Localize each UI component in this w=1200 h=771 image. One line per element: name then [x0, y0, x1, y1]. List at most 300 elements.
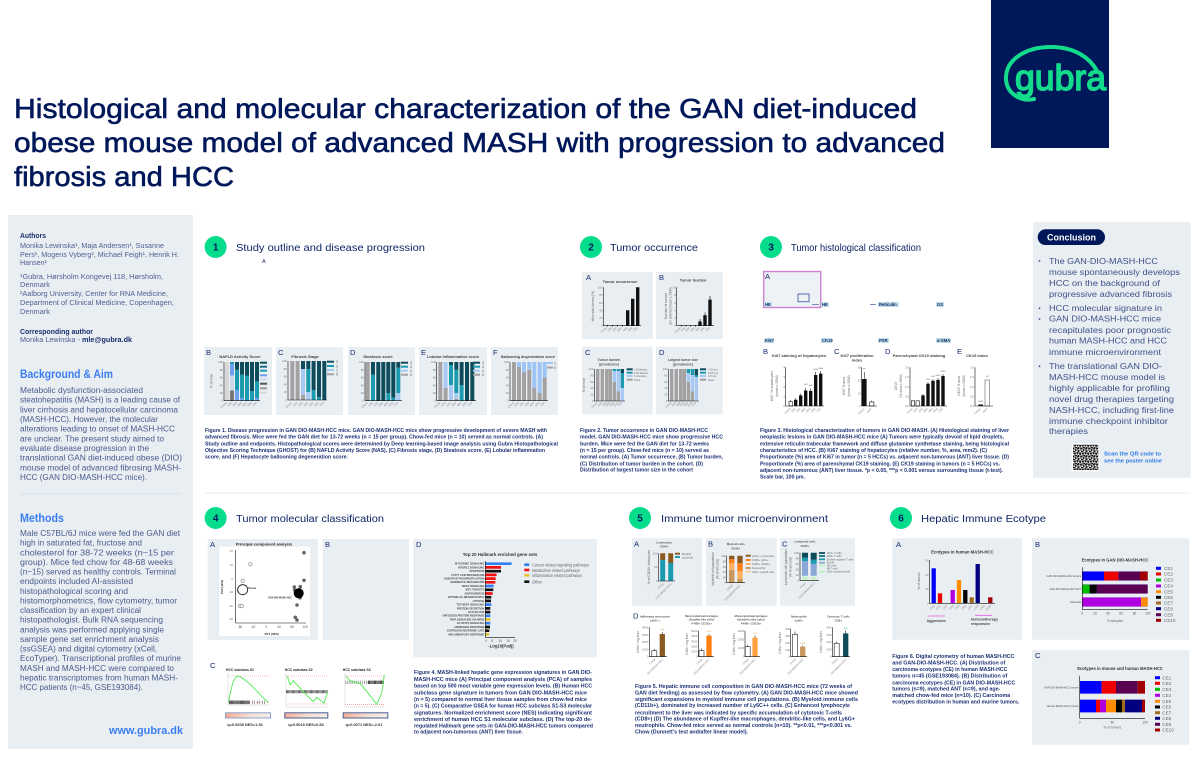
chart: parenchymal CK19 staining: **** — [936, 374, 941, 378]
figure 1 caption: Figure 1. Disease progression in GAN DIO-MASH-HCC mice. GAN DIO-MASH-HCC mice show progressive development of severe MASH with — [205, 428, 547, 434]
GSEA S1: HCC subclass S1 — [226, 668, 254, 672]
chart: fibrosis stage: 23w — [297, 400, 304, 407]
C legend: CE1 — [1162, 675, 1172, 680]
chart: NAFLD Activity Score: 38w — [236, 400, 243, 407]
chart: steatosis score: 20 — [361, 391, 364, 395]
chart: tumor burden prevalence: None — [634, 378, 641, 382]
chart: Ki67 hepatocytes: 0 — [783, 404, 785, 408]
methods: high in saturated fat, fructose and — [20, 539, 142, 548]
chart: largest tumor size prevalence: 1-5 mm — [708, 374, 717, 378]
authors — [20, 233, 179, 344]
chart: lymphoid cells: C — [782, 540, 788, 548]
chart: ecotypes in human MASH-HCC: Ecotypes in human MASH-HCC — [931, 550, 993, 554]
figure 4 caption: enrichment of human HCC S1 molecular subclass. (D) The top-20 de- — [414, 717, 592, 723]
neutrophils: DIO-MASH-HCC — [787, 657, 805, 676]
chart: top 20 Hallmark gene sets: MYC TARGETS — [466, 588, 485, 592]
chart: top 20 Hallmark gene sets: FATTY ACID METABOLISM — [451, 573, 484, 577]
neutrophils: 400 — [785, 627, 790, 631]
chart: top 20 Hallmark gene sets: APOPTOSIS — [469, 569, 485, 573]
chart: tumor occurrence bars: 100 — [598, 286, 603, 290]
chart: ecotypes in mouse and human: GAN DIO-MASH-HCC tumors — [1044, 686, 1079, 690]
B legend: CE6 — [1164, 595, 1173, 600]
chart: lobular inflammation score: 3 — [482, 361, 484, 365]
chart: steatosis score: Chow — [360, 400, 369, 409]
histology stain tags: CK19 — [822, 338, 833, 343]
chart: leukocytes: Lymphoid — [682, 555, 694, 559]
heading 5: Immune tumor microenvironment — [661, 513, 828, 525]
title: Histological and molecular characterization of the GAN diet-induced — [14, 93, 917, 124]
figure 5 caption: Chow (Dunnett's test and/after linear model). — [635, 729, 749, 735]
cytotoxic T cells: Cells / mg liver — [819, 630, 823, 653]
chart: top 20 Hallmark gene sets: MTORC1 SIGNALING — [458, 565, 484, 569]
chart: top 20 Hallmark gene sets: TGF BETA SIGNALING — [456, 602, 484, 606]
methods: Methods — [20, 511, 64, 525]
histology stain tags: α-SMA — [937, 338, 950, 343]
chart: tumor burden prevalence: 60 — [590, 380, 594, 384]
C legend: CE8 — [1162, 716, 1172, 721]
chart: lymphoid cells: 0 — [797, 579, 799, 583]
chart: tumor occurrence bars: 72w — [632, 325, 639, 332]
chart: ecotypes in GAN DIO-MASH-HCC: 0 — [1081, 612, 1083, 616]
chart: top 20 Hallmark gene sets: 0 — [485, 639, 487, 643]
chart: top 20 Hallmark gene sets: ANDROGEN RESPONSE — [454, 625, 485, 629]
chart: ballooning degeneration score: 0 — [507, 399, 509, 403]
chart: Ki67 hepatocytes: *** — [804, 383, 808, 387]
chart: tumor burden prevalence: 72w — [616, 400, 624, 407]
section 4: tumor molecular classification — [205, 507, 597, 736]
chart: lobular inflammation score: 0 — [482, 373, 484, 377]
monocyte macrophages 1: Chow — [696, 657, 704, 665]
figure 3 caption: adjacent non-tumorous (ANT) liver tissue. *p < 0.05, ***p < 0.001 versus surrounding tissue (t-test). — [760, 468, 1004, 474]
cytotoxic T cells: Chow — [831, 657, 839, 665]
chart: tumor burden prevalence: 38w — [604, 400, 612, 407]
chart: fibrosis stage: 60w — [313, 400, 320, 407]
chart: immune cell counts — [633, 612, 850, 676]
chart: top 20 Hallmark gene sets: -Log10(Padj) — [488, 644, 514, 648]
background and aim: steatohepatitis (MASH) is a leading cause of — [20, 396, 181, 405]
chart: tumor occurrence bars: 38w — [616, 325, 623, 332]
monocyte macrophages 2: 0 — [743, 655, 745, 659]
C legend: CE6 — [1162, 705, 1172, 710]
chart: CK19 index: CK19 % area — [957, 376, 961, 396]
background and aim: HCC (GAN DIO-MASH-HCC mice). — [20, 473, 147, 482]
chart: largest tumor size prevalence: (prevalence) — [673, 362, 693, 366]
chart: lobular inflammation score: 60w — [461, 400, 468, 407]
infiltrating monocytes: 4000 — [642, 626, 649, 630]
chart: parenchymal CK19 staining: 23w — [917, 406, 924, 413]
chart: NAFLD Activity Score: 13w — [226, 400, 233, 407]
chart: ecotypes in mouse and human — [1032, 650, 1189, 745]
chart: ballooning degeneration score: 20 — [506, 391, 509, 395]
chart: fibrosis stage — [276, 347, 343, 415]
chart: ecotypes in human MASH-HCC: Immunotherapy — [971, 618, 998, 622]
chart: lobular inflammation score: 48w — [456, 400, 463, 407]
chart: Ki67 hepatocytes: 72w — [815, 406, 822, 413]
QR code — [1072, 443, 1100, 471]
chart: myeloid cells: 20 — [723, 576, 726, 580]
chart: Ki67 proliferation index: Ki67 % area — [842, 377, 846, 395]
chart: PCA scatter — [208, 539, 318, 640]
chart: ecotypes in mouse and human: C — [1035, 651, 1041, 660]
chart: tumor burden bars: 38w — [689, 325, 696, 332]
neutrophils: 300 — [785, 634, 790, 638]
conclusion bullets: HCC on the background of — [1049, 278, 1161, 288]
chart: lymphoid cells: 60 — [796, 562, 799, 566]
chart: CK19 index: (mean ± SEM) — [962, 375, 966, 397]
chart: steatosis score: 60 — [361, 376, 364, 380]
chart: ecotypes in human MASH-HCC: CE4 — [948, 604, 955, 611]
chart: lobular inflammation score: 20 — [433, 391, 436, 395]
heading 5: 5 — [637, 514, 643, 524]
chart: tumor burden bars: 8 — [674, 293, 676, 297]
chart: lymphoid cells: CD8+ T cells — [827, 554, 842, 558]
figure 1 caption: Objective Scoring Technique (GHOST) for (B) NAFLD Activity Score (NAS), (C) Fibrosis stage, (D) Steatosis score, (E) Lobular inflammation — [205, 448, 545, 454]
chart: lymphoid cells: Lymphoid cell population — [784, 549, 788, 585]
chart: ballooning degeneration score: Ballooning degeneration score — [501, 355, 555, 359]
chart: myeloid cells: 40 — [723, 570, 726, 574]
infiltrating monocytes: 3000 — [642, 633, 649, 637]
chart: tumor occurrence bars: A — [586, 273, 592, 282]
chart: NAFLD Activity Score: 60w — [246, 400, 253, 407]
figure 6 caption: carcinoma ecotypes (CE) in GAN DIO-MASH-HCC — [892, 680, 1016, 686]
B legend: CE8 — [1164, 606, 1173, 611]
chart: ecotypes in human MASH-HCC: CE6 — [960, 604, 967, 611]
chart: NAFLD Activity Score: 72w — [251, 400, 258, 407]
chart: largest tumor size prevalence: Chow — [664, 400, 673, 409]
chart: parenchymal CK19 staining: 2.0 — [905, 366, 909, 370]
chart: tumor burden prevalence: 20 — [590, 393, 594, 397]
QR caption: Scan the QR code to — [1104, 452, 1162, 458]
chart: steatosis score: 0 — [362, 399, 364, 403]
histology stain tags — [764, 302, 951, 343]
chart: Ki67 hepatocytes: Ki67, % hepatocytes — [770, 371, 774, 401]
chart: tumor burden bars: 0 — [674, 324, 676, 328]
chart: tumor occurrence bars: 40 — [599, 308, 603, 312]
background and aim: evaluate disease progression in the — [20, 444, 150, 453]
methods: hepatic transcriptomes from human MASH- — [20, 674, 178, 682]
histology stain tags: Reticulin — [879, 302, 897, 307]
chart: top 20 Hallmark gene sets: ESTROGEN RESPONSE LATE — [447, 629, 485, 633]
chart: fibrosis stage: 2 — [336, 364, 338, 368]
conclusion bullets: therapies — [1049, 426, 1088, 436]
chart: NAFLD Activity Score: 40 — [220, 383, 223, 387]
figure 6 caption: Figure 6. Digital cytometry of human MASH-HCC — [892, 654, 1015, 660]
chart: tumor burden prevalence: (prevalence) — [599, 362, 619, 366]
chart: steatosis score: 2 — [410, 365, 412, 369]
neutrophils: 100 — [785, 648, 790, 652]
methods: Male C57BL/6J mice were fed the GAN diet — [20, 529, 181, 538]
chart: lobular inflammation score: 23w — [445, 400, 452, 407]
infiltrating monocytes: Ly6C++ — [650, 618, 660, 622]
C legend: CE7 — [1162, 710, 1172, 715]
chart: tumor burden prevalence: 48w — [608, 400, 616, 407]
chart: tumor occurrence bars: Mice with tumors (%) — [591, 291, 595, 321]
chart: largest tumor size prevalence: D — [659, 348, 665, 357]
chart: top 20 Hallmark gene sets: Top 20 Hallmark enriched gene sets — [463, 552, 538, 557]
chart: fibrosis stage: 0 — [285, 398, 287, 402]
chart: Ki67 hepatocytes: B — [763, 347, 768, 356]
cytotoxic T cells: 600 — [827, 633, 832, 637]
chart: Ki67 proliferation index: Tumor — [857, 407, 866, 416]
figure 1 caption: Study outline and endpoints. Histopathological scores were determined by Deep learning-based image analysis using Gubra Histopathological — [205, 441, 559, 447]
cytotoxic T cells: 800 — [827, 626, 832, 630]
chart: ecotypes in mouse and human: 100 — [1142, 720, 1148, 724]
chart: fibrosis stage: Fibrosis Stage — [291, 354, 320, 359]
chart: largest tumor size prevalence: 80 — [664, 373, 668, 377]
chart: ecotypes in human MASH-HCC: CE10 — [984, 604, 992, 612]
chart: tumor burden prevalence: 40 — [590, 386, 594, 390]
chart: ecotypes in human MASH-HCC: CE1 — [929, 604, 936, 611]
chart: steatosis score: 48w — [382, 400, 390, 407]
conclusion bullets: highly applicable for profiling — [1049, 383, 1170, 393]
figure 4 caption: subclass gene signature in tumors from GAN DIO-MASH-HCC mice — [414, 690, 587, 696]
figure 5 caption: Figure 5. Hepatic immune cell composition in GAN DIO-MASH-HCC mice (72 weeks of — [635, 684, 852, 690]
B legend: CE4 — [1164, 584, 1173, 589]
chart: myeloid cells: Chow — [726, 583, 734, 591]
chart: Ki67 proliferation index: index — [852, 358, 863, 362]
C legend: CE2 — [1162, 681, 1172, 686]
chart: CK19 index: ** — [986, 375, 989, 379]
methods: sample gene set enrichment analysis — [20, 635, 159, 644]
chart: tumor burden bars: Chow — [674, 325, 682, 334]
figure 2 caption: burden. Mice were fed the GAN diet for 13-72 weeks — [580, 441, 709, 447]
methods: (ssGSEA) and digital cytometry (xCell, — [20, 645, 157, 654]
monocyte macrophages 1: 3000 — [691, 640, 698, 644]
chart: parenchymal CK19 staining: 0.0 — [905, 404, 909, 408]
chart: top 20 Hallmark gene sets: XENOBIOTIC METABOLISM — [450, 580, 484, 584]
logo: gubra — [991, 0, 1109, 148]
chart: largest tumor size prevalence: 38w — [678, 400, 686, 407]
chart: leukocytes: Myeloid — [682, 552, 691, 556]
chart: ecotypes in human MASH-HCC: CE5 — [954, 604, 961, 611]
section 1: study outline and disease progression: A — [262, 259, 266, 265]
chart: ballooning degeneration score: 13w — [513, 400, 520, 407]
chart: PCA scatter: GAN DIO-MASH-HCC — [268, 596, 292, 600]
chart: lobular inflammation score: 80 — [433, 368, 436, 372]
monocyte macrophages 2 — [732, 614, 768, 676]
conclusion bullets — [1039, 256, 1180, 436]
chart: tumor burden bars: per animal (mean ± SEM) — [668, 287, 672, 325]
chart: myeloid cells: (% of all cells) — [716, 559, 720, 579]
chart: lymphoid cells: B cells — [827, 561, 835, 565]
chart: steatosis score: 60w — [387, 400, 395, 407]
chart: PCA scatter: Chow — [248, 586, 257, 590]
C legend — [1155, 675, 1174, 733]
chart: Ki67 hepatocytes: 3 — [783, 375, 785, 379]
background and aim: alterations leading to onset of MASH-HCC — [20, 425, 175, 434]
chart: Ki67 proliferation index: 20 — [858, 378, 861, 382]
figure 4 caption — [414, 670, 593, 736]
heading 2: 2 — [588, 242, 594, 254]
chart: leukocytes: A — [634, 540, 640, 548]
chart: CK19 index: E — [957, 347, 962, 356]
figure 6 caption: tumors (n=9), matched ANT (n=9), and age- — [892, 687, 1001, 693]
chart: ecotypes in human MASH-HCC: responsive — [971, 622, 990, 626]
B legend: CE7 — [1164, 601, 1173, 606]
chart: tumor burden prevalence: 1-5 lesions — [634, 374, 647, 378]
chart: tumor occurrence bars: 20 — [599, 316, 603, 320]
chart: Ki67 hepatocytes: Chow — [783, 406, 792, 415]
chart: top 20 Hallmark gene sets: 20 — [513, 639, 517, 643]
chart: ecotypes in human MASH-HCC: % of tumors — [917, 572, 921, 590]
chart: ecotypes in GAN DIO-MASH-HCC — [1032, 538, 1189, 640]
methods: histopathologist. Bulk RNA sequencing — [20, 616, 163, 625]
chart: lobular inflammation score: 60 — [433, 376, 436, 380]
conclusion bullets: MASH-HCC mouse model is — [1049, 372, 1165, 382]
conclusion bullets: immune checkpoint inhibitor — [1049, 416, 1168, 426]
chart: CK19 index: 1.5 — [970, 375, 974, 379]
chart: fibrosis stage: Chow — [285, 400, 293, 409]
conclusion bullets: recapitulates poor prognostic — [1049, 325, 1172, 335]
figure 1 caption — [205, 428, 559, 461]
authors: mle@gubra.dk — [82, 337, 132, 344]
methods: analysis was performed applying single — [20, 625, 165, 634]
chart: tumor burden prevalence: 100 — [589, 367, 594, 371]
chart: Ki67 hepatocytes: 48w — [805, 406, 812, 413]
chart: ecotypes in GAN DIO-MASH-HCC: 60 — [1119, 612, 1123, 616]
figure 5 caption: neutrophils. Chow-fed mice served as normal controls (n=10). **p<0.01, ***p<0.001 vs. — [635, 723, 853, 729]
chart: CK19 index — [957, 347, 993, 416]
chart: PCA scatter: 120 — [302, 625, 308, 629]
heading 4: 4 — [213, 514, 219, 524]
chart: tumor occurrence bars: 80 — [599, 293, 603, 297]
chart: ecotypes in human MASH-HCC — [892, 538, 1022, 640]
chart: myeloid cells: Neutrophils — [752, 566, 766, 570]
chart: CK19 index: **** — [978, 400, 984, 404]
chart: largest tumor size prevalence: 100 — [663, 367, 668, 371]
section 5: immune tumor microenvironment — [629, 507, 858, 735]
authors: Authors — [20, 233, 46, 240]
methods: EcoTyper). Transcriptional profiles of murine — [20, 654, 182, 663]
chart: ecotypes in human MASH-HCC: 0 — [927, 601, 929, 605]
chart: ecotypes in mouse and human: Ecotypes in mouse and human MASH-HCC — [1077, 666, 1163, 671]
chart: tumor occurrence bars: 23w — [611, 325, 618, 332]
chart: top 20 Hallmark gene sets: HYPOXIA — [473, 599, 484, 603]
chart: ecotypes in human MASH-HCC: CE3 — [941, 604, 948, 611]
chart: PCA scatter: -20 — [229, 590, 233, 594]
monocyte macrophages 2: 1000 — [738, 646, 745, 650]
chart: CK19 index: ANT — [982, 407, 989, 414]
chart: myeloid cells: DIO-MASH-HCC — [724, 583, 742, 602]
chart: steatosis score: 23w — [372, 400, 380, 407]
chart: leukocytes: DIO-MASH-HCC — [655, 582, 673, 600]
chart: ecotypes in human MASH-HCC: Aggressive — [927, 619, 946, 623]
authors: Denmark — [20, 309, 51, 316]
chart: top 20 Hallmark gene sets: GLYCOLYSIS — [468, 610, 485, 614]
heading 3: 3 — [768, 242, 774, 254]
chart: ecotypes in GAN DIO-MASH-HCC: GAN DIO-MASH-HCC tumors — [1047, 574, 1082, 578]
authors: Hansen¹ — [20, 260, 48, 267]
chart: myeloid cells: F4/80+ Ly6C+ — [752, 558, 769, 562]
chart: ecotypes in human MASH-HCC: 20 — [925, 573, 929, 577]
monocyte macrophages 2: F4/80+ CD11b+ — [741, 621, 762, 625]
chart: largest tumor size prevalence: >10 mm — [708, 368, 717, 372]
conclusion pill: Conclusion — [1047, 232, 1096, 242]
chart: tumor burden bars: Number of tumors — [664, 292, 668, 319]
chart: ecotypes in human MASH-HCC: CE2 — [935, 604, 942, 611]
B legend: CE2 — [1164, 572, 1173, 577]
chart: leukocytes — [632, 538, 702, 606]
chart: myeloid cells: F4/80+ CD11b+ — [752, 562, 771, 566]
chart: lobular inflammation score: 0 — [434, 399, 436, 403]
chart: ecotypes in GAN DIO-MASH-HCC: B — [1035, 540, 1040, 549]
neutrophils: 200 — [785, 641, 790, 645]
chart: tumor burden prevalence: Chow — [590, 400, 599, 409]
GSEA S2: HCC subclass S2 — [285, 668, 313, 672]
neutrophils: **** — [800, 642, 806, 646]
methods: cholesterol for 38-72 weeks (n~15 per — [20, 548, 174, 557]
chart: Ki67 proliferation index: ** — [863, 368, 866, 372]
infiltrating monocytes: Cells / mg liver — [636, 630, 640, 653]
chart: tumor burden prevalence: 13w — [596, 400, 604, 407]
cytotoxic T cells: CD8+ — [835, 618, 842, 622]
conclusion bullets: progressive advanced fibrosis — [1049, 289, 1172, 299]
chart: Ki67 hepatocytes: (mean ± SEM) — [775, 375, 779, 397]
chart: PCA scatter: PC1 (35%) — [265, 632, 279, 636]
chart: top 20 Hallmark gene sets: D — [416, 540, 422, 549]
chart: fibrosis stage: 0 — [336, 373, 338, 377]
chart: tumor occurrence bars: 60 — [599, 301, 603, 305]
chart: myeloid cells: 60 — [723, 565, 726, 569]
C legend: CE9 — [1162, 722, 1172, 727]
chart: lymphoid cells: NKT cells — [827, 566, 838, 570]
chart: parenchymal CK19 staining — [885, 347, 947, 415]
figure 6 caption: tumors n=45 (GSE193084). (B) Distribution of — [892, 674, 1008, 680]
chart: PCA scatter: A — [210, 540, 216, 549]
chart: ballooning degeneration score: 60 — [506, 376, 509, 380]
chart: largest tumor size prevalence: 60w — [686, 400, 694, 407]
monocyte macrophages 1: 0 — [696, 655, 698, 659]
infiltrating monocytes: Infiltrating monocytes — [640, 614, 670, 618]
chart: ballooning degeneration score: 48w — [528, 400, 536, 407]
GSEA S2 — [285, 668, 328, 727]
conclusion pill — [1038, 229, 1105, 245]
figure 5 caption — [635, 684, 858, 735]
authors: ¹Gubra, Hørsholm Kongevej 118, Hørsholm, — [20, 274, 163, 281]
chart: NAFLD Activity Score: 48w — [241, 400, 248, 407]
chart: tumor burden bars: 13w — [680, 325, 687, 332]
figure 3 caption — [760, 428, 1010, 481]
histology stain tags: HE — [822, 302, 828, 307]
figure 6 caption: and GAN-DIO-MASH-HCC. (A) Distribution of — [892, 661, 1006, 667]
chart: lobular inflammation score: 13w — [440, 400, 447, 407]
figure 3 caption: extensive reticulin trabecular framework and diffuse glutamine synthetase staining, being histological — [760, 441, 1010, 447]
chart: ecotypes in human MASH-HCC: 30 — [925, 558, 929, 562]
chart: lymphoid cells: Chow — [799, 581, 807, 589]
figure 5 caption: (CD8+) (D) The abundance of Kupffer-like macrophages, dendritic-like cells, and Ly6G+ — [635, 716, 855, 722]
figure 1 caption: advanced fibrosis. Mice were fed the GAN diet for 13-72 weeks (n = 15 per group). Chow-fed mice (n = 10) served as normal controls. (A) — [205, 435, 543, 441]
figure 4 caption: MASH-HCC mice (A) Principal component analysis (PCA) of samples — [414, 677, 592, 683]
chart: lymphoid cells: (% of all cells) — [788, 557, 792, 577]
histology panel A frame: A — [765, 272, 771, 281]
authors: Denmark — [20, 282, 51, 289]
chart: Ki67 proliferation index: 0 — [859, 404, 861, 408]
chart: NAFLD Activity Score: B — [206, 348, 211, 357]
chart: ecotypes in GAN DIO-MASH-HCC: 80 — [1133, 612, 1136, 616]
chart: NAFLD Activity Score: 100 — [218, 360, 223, 364]
chart: fibrosis stage: 72w — [318, 400, 326, 407]
chart: Ki67 hepatocytes: Ki67 staining of hepatocytes — [772, 353, 827, 358]
chart: ballooning degeneration score: 80 — [506, 368, 509, 372]
figure 2 caption: (n = 15 per group). Chow-fed mice (n = 10) served as — [580, 448, 709, 454]
background and aim: Background & Aim — [20, 367, 113, 381]
neutrophils: Neutrophils — [791, 614, 807, 618]
methods: histomorphometrics, flow cytometry, tumor — [20, 596, 177, 605]
figure 2 caption — [580, 428, 724, 474]
chart: PCA scatter: -80 — [238, 625, 243, 629]
neutrophils — [778, 614, 807, 676]
figure 2 caption: normal controls. (A) Tumor occurrence, (B) Tumor burden, — [580, 455, 724, 461]
